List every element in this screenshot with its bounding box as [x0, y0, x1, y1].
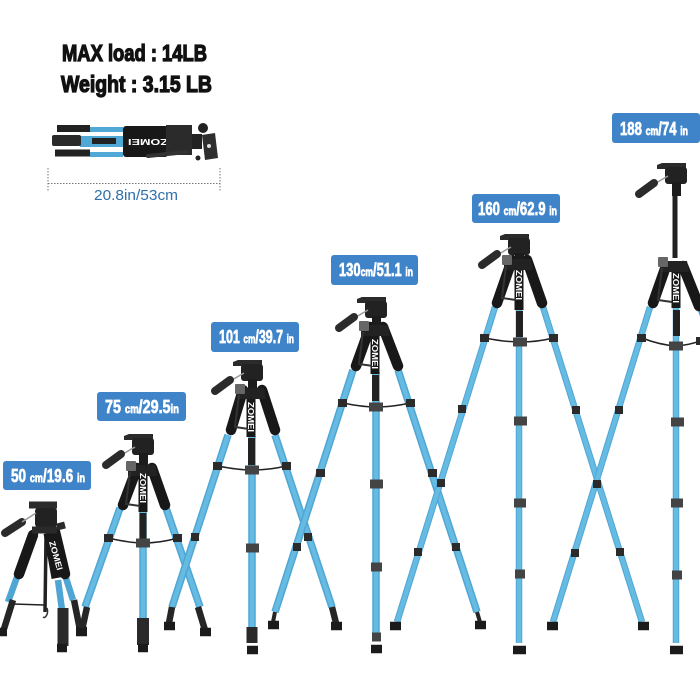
label: 188 cm: 188 cm/74 in: [620, 119, 688, 139]
folded length label: 20.8in/53cm: [94, 187, 178, 204]
tripod 188 cm: [547, 163, 700, 650]
brand name: ZOMEI: [671, 273, 681, 303]
label: 50 cm: 50 cm/19.6 in: [11, 466, 85, 486]
label: 130 cm: 130cm/51.1 in: [339, 260, 413, 280]
folded tripod: [52, 123, 218, 160]
tripod 160 cm: [390, 234, 649, 650]
brand name: ZOMEI: [138, 473, 148, 503]
brand name: ZOMEI: [514, 270, 524, 300]
label: 130 cm: [331, 255, 418, 285]
brand name, upside down: ZOMEI: [128, 137, 168, 147]
weight text: Weight : 3.15 LB: [61, 71, 212, 97]
label: 75 cm: 75 cm/29.5in: [105, 397, 179, 417]
label: 160 cm: [472, 194, 560, 223]
title: specifications: [61, 40, 212, 97]
tripod 50 cm: [0, 505, 87, 648]
label: 75 cm: [97, 392, 186, 421]
folded length dimension: [48, 168, 220, 204]
label: 188 cm: [612, 113, 700, 143]
tripod 130 cm: [268, 297, 486, 649]
label: 101 cm: [211, 322, 299, 352]
brand name: ZOMEI: [47, 540, 65, 571]
label: 50 cm: [3, 461, 91, 490]
brand name: ZOMEI: [246, 402, 256, 432]
max load text: MAX load : 14LB: [62, 40, 207, 66]
tripod 101 cm: [164, 360, 342, 650]
label: 160 cm: 160 cm/62.9 in: [478, 199, 557, 219]
brand name: ZOMEI: [370, 339, 380, 369]
tripod 75 cm: [76, 434, 211, 648]
label: 101 cm: 101 cm/39.7 in: [219, 327, 294, 347]
